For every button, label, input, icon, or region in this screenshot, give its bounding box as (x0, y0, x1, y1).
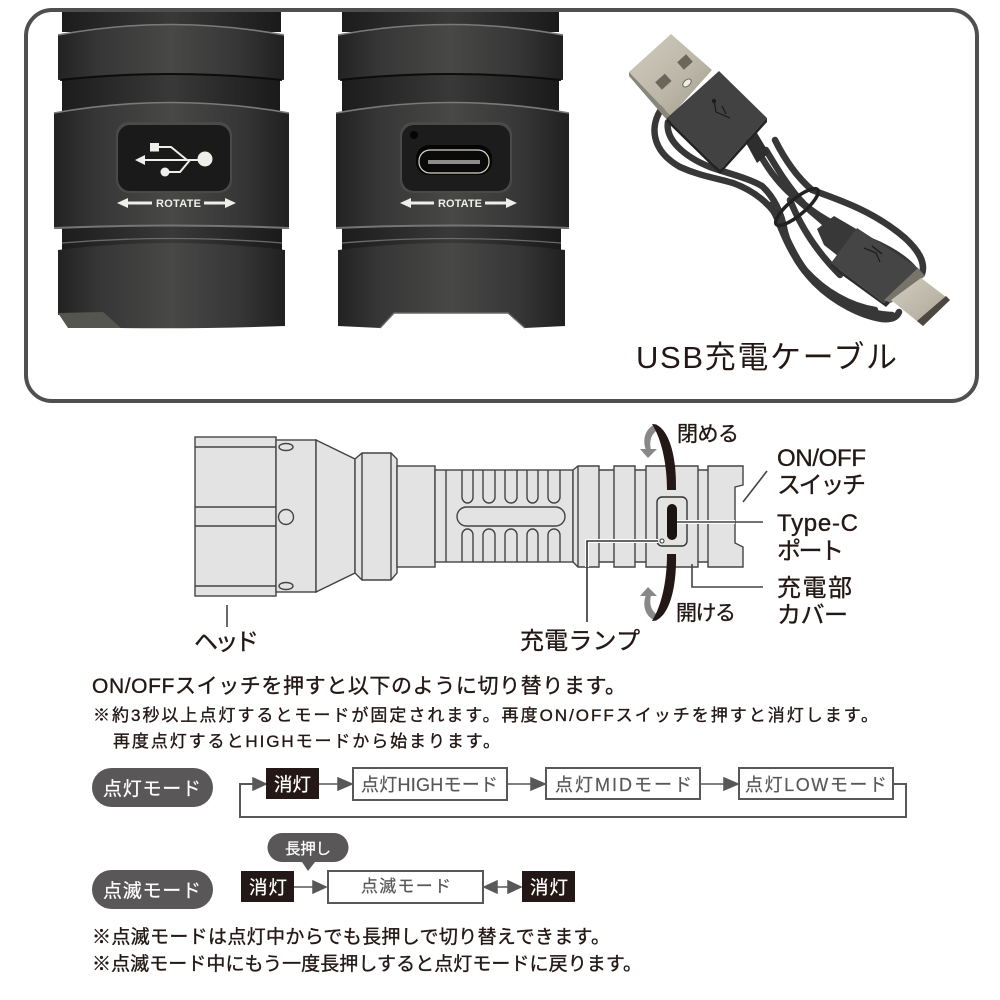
return line (240, 784, 906, 817)
step: low: 点灯LOWモード (745, 775, 887, 795)
instruction note: 再度点灯するとHIGHモードから始まります。 (113, 732, 500, 751)
step: off: 消灯 (274, 774, 311, 795)
leader: head (226, 605, 228, 627)
arrowheads (253, 778, 738, 790)
callout: long press (268, 833, 348, 871)
rotate marking (117, 198, 236, 210)
footer notes: ※点滅モードは点灯中からでも長押しで切り替えできます。 (92, 926, 610, 948)
step: low (739, 768, 893, 799)
neck ring (355, 453, 435, 580)
diagram: flashlight outline (195, 437, 743, 596)
flow: lighting mode (240, 768, 906, 817)
panel: product photos (26, 10, 977, 401)
USB window (116, 122, 232, 193)
label: Type-C port: Type-C (777, 510, 858, 537)
arrow: both ways (484, 881, 521, 893)
tail section (573, 466, 743, 567)
instruction note (93, 706, 878, 751)
leader: ON/OFF switch (743, 471, 767, 502)
step: off (266, 768, 319, 799)
instruction note: ※約3秒以上点灯するとモードが固定されます。再度ON/OFFスイッチを押すと消灯します。 (93, 706, 878, 725)
arrow: to blink (294, 881, 326, 893)
icon: open rotation arrow (640, 554, 676, 621)
rotate marking (400, 198, 517, 210)
step: off again: 消灯 (530, 877, 568, 898)
badge: blinking mode: 点滅モード (103, 880, 201, 902)
badge: lighting mode (92, 768, 213, 807)
icon: close rotation arrow (640, 424, 676, 490)
label: Type-C port: ポート (777, 538, 844, 565)
label: charging cover (777, 575, 852, 629)
label: charging lamp: 充電ランプ (520, 628, 640, 655)
instruction heading: ON/OFFスイッチを押すと以下のように切り替ります。 (92, 675, 626, 698)
USB-C plug (831, 228, 950, 326)
badge: blinking mode (92, 870, 213, 909)
leader: charging cover (692, 564, 763, 587)
step: mid (546, 768, 700, 799)
step: blink (328, 871, 483, 903)
step: high: 点灯HIGHモード (361, 775, 498, 795)
photo: flashlight with Type-C port open (336, 12, 569, 328)
label: open: 開ける (676, 602, 736, 625)
label: ON/OFF switch: ON/OFF (777, 445, 866, 472)
step: mid: 点灯MIDモード (555, 775, 692, 795)
step: high (353, 768, 507, 800)
label: ON/OFF switch (777, 445, 866, 499)
USB-A plug (629, 34, 767, 174)
label: charging cover: カバー (777, 602, 848, 629)
photo: flashlight with USB cover closed (54, 12, 289, 328)
badge: lighting mode: 点灯モード (103, 778, 201, 800)
leader: charging lamp (587, 541, 658, 622)
footer notes: ※点滅モード中にもう一度長押しすると点灯モードに戻ります。 (92, 953, 642, 975)
photo: USB charging cable (629, 34, 950, 326)
leader: Type-C port (677, 520, 763, 524)
rotate marking: ROTATE (438, 198, 482, 210)
footer notes (92, 926, 642, 975)
label: Type-C port (777, 510, 858, 565)
label: ON/OFF switch: スイッチ (777, 472, 866, 499)
callout: long press: 長押し (285, 840, 331, 858)
Type-C port (400, 122, 512, 193)
caption: USB cable: USB充電ケーブル (636, 340, 897, 375)
flow: blinking mode (241, 871, 575, 903)
rotate marking: ROTATE (156, 198, 201, 210)
head section (195, 437, 355, 596)
step: off (241, 871, 294, 902)
step: off: 消灯 (249, 877, 287, 898)
label: charging cover: 充電部 (777, 575, 852, 602)
label: close: 閉める (677, 423, 739, 446)
grip body (435, 470, 573, 562)
step: blink: 点滅モード (361, 877, 451, 896)
step: off again (522, 871, 575, 902)
label: head: ヘッド (194, 629, 259, 656)
charging cover window (657, 497, 687, 546)
